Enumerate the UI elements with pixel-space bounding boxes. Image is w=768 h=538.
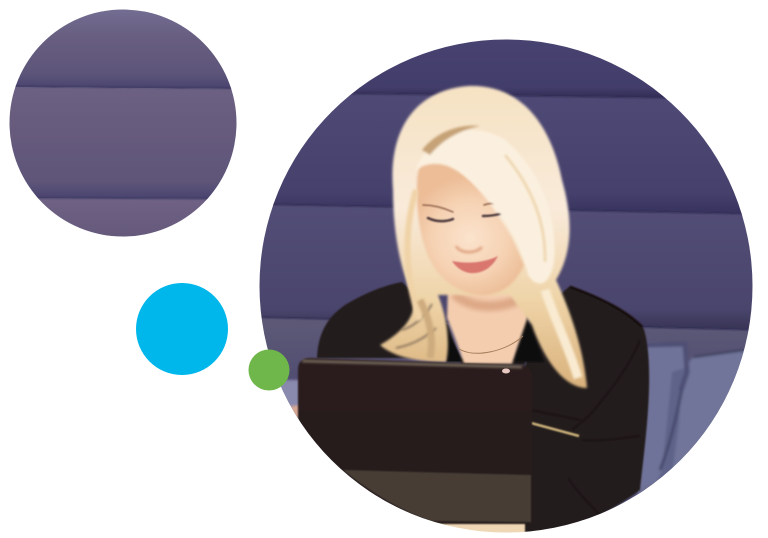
cushions xyxy=(636,342,744,494)
jacket xyxy=(317,282,649,535)
nose shadow xyxy=(456,246,482,252)
neck and chest xyxy=(447,285,528,364)
black top xyxy=(446,312,544,362)
face xyxy=(417,155,524,295)
eyebrows and eyes xyxy=(423,204,503,221)
jacket pocket trim xyxy=(531,423,579,436)
photo circle: upholstered bench detail xyxy=(10,10,236,236)
table edge xyxy=(423,518,532,532)
tablet lower strap xyxy=(343,470,531,522)
mouth xyxy=(452,256,498,273)
tablet top edge highlight xyxy=(302,361,522,367)
main photo: woman with tablet xyxy=(250,30,760,538)
bench bands xyxy=(250,30,760,520)
hair mass xyxy=(380,86,587,388)
dark gaps in left hair xyxy=(396,304,436,348)
blue dot xyxy=(136,283,228,375)
necklace xyxy=(459,336,523,353)
green dot xyxy=(248,350,290,390)
tablet camera glint xyxy=(502,368,510,374)
front hair sweep xyxy=(407,126,578,378)
bench bands xyxy=(15,10,232,89)
tablet xyxy=(298,358,532,524)
